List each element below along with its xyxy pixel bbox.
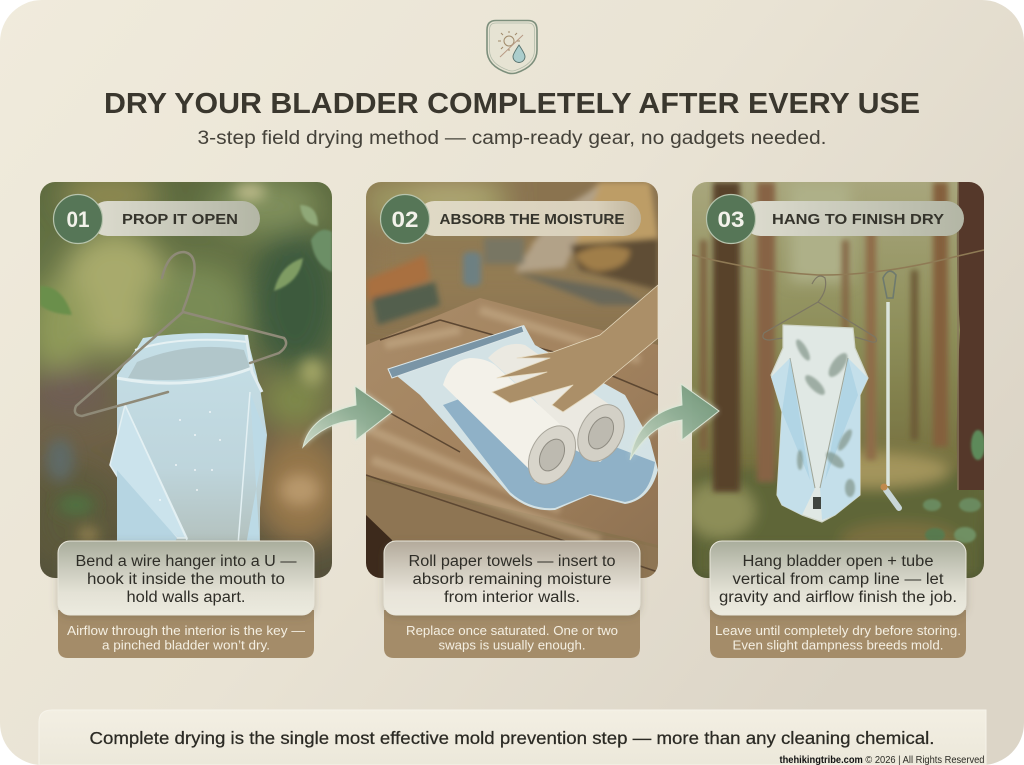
- step 3 caption: Hang bladder open + tube: [742, 553, 934, 570]
- hand: [492, 285, 658, 412]
- step 3 caption: gravity and airflow finish the job.: [719, 589, 957, 606]
- step 1 caption: [58, 541, 314, 615]
- step 2 header badge: ABSORB THE MOISTURE: [440, 212, 625, 228]
- step 2 note: Replace once saturated. One or two: [406, 624, 618, 638]
- step 2 caption: absorb remaining moisture: [412, 571, 612, 588]
- step 1 header badge: 01: [66, 207, 90, 232]
- step 1 header badge: PROP IT OPEN: [122, 212, 238, 228]
- arrow: step 1 to step 2: [303, 386, 392, 447]
- step 1 note: [58, 610, 314, 658]
- panel: step 1 photo: [40, 182, 332, 578]
- step 2 caption: [384, 541, 640, 615]
- step 2 caption: Roll paper towels — insert to: [408, 553, 616, 570]
- step 3 note: Leave until completely dry before storing.: [715, 624, 961, 638]
- step 1 caption: Bend a wire hanger into a U —: [76, 553, 297, 570]
- step 3 note: Even slight dampness breeds mold.: [732, 638, 944, 652]
- title: DRY YOUR BLADDER COMPLETELY AFTER EVERY USE: [104, 88, 920, 120]
- panel: step 2 photo: [366, 181, 658, 578]
- step 3 caption: [710, 541, 966, 615]
- step 1 caption: hook it inside the mouth to: [87, 571, 285, 588]
- icon: sun and water drop badge: [487, 20, 537, 74]
- step 3 caption: vertical from camp line — let: [732, 571, 944, 588]
- paper towel rolls: [488, 344, 618, 462]
- camp line: [692, 250, 984, 275]
- step 3 note: [710, 610, 966, 658]
- arrow: step 2 to step 3: [630, 384, 719, 460]
- subtitle: 3-step field drying method — camp-ready gear, no gadgets needed.: [198, 128, 826, 149]
- step 2 note: [384, 610, 640, 658]
- hanger: [763, 276, 876, 342]
- step 2 header badge: [380, 194, 641, 244]
- bottom takeaway bar: [39, 710, 986, 765]
- wooden table: [366, 298, 658, 545]
- step 2 caption: from interior walls.: [444, 589, 580, 606]
- step 2 note: swaps is usually enough.: [438, 638, 586, 652]
- step 1 note: Airflow through the interior is the key —: [67, 624, 306, 638]
- step 3 header badge: HANG TO FINISH DRY: [772, 212, 944, 228]
- panel: step 3 photo: [685, 182, 985, 580]
- step 1 header badge: [54, 194, 260, 244]
- bottom takeaway bar: Complete drying is the single most effective mold prevention step — more than any cleaning chemical.: [90, 728, 934, 748]
- right tree trunk: [957, 182, 984, 490]
- step 1 caption: hold walls apart.: [126, 589, 246, 606]
- step 1 note: a pinched bladder won’t dry.: [102, 638, 270, 652]
- wire hanger: [75, 252, 286, 416]
- foreground leaves: [923, 430, 985, 543]
- step 3 header badge: 03: [718, 207, 744, 232]
- bladder lying flat: [392, 325, 658, 510]
- step 2 header badge: 02: [392, 207, 418, 232]
- step 3 header badge: [706, 194, 964, 244]
- bladder: [771, 325, 868, 522]
- carabiner and tube: [883, 271, 896, 298]
- bladder: [117, 333, 267, 540]
